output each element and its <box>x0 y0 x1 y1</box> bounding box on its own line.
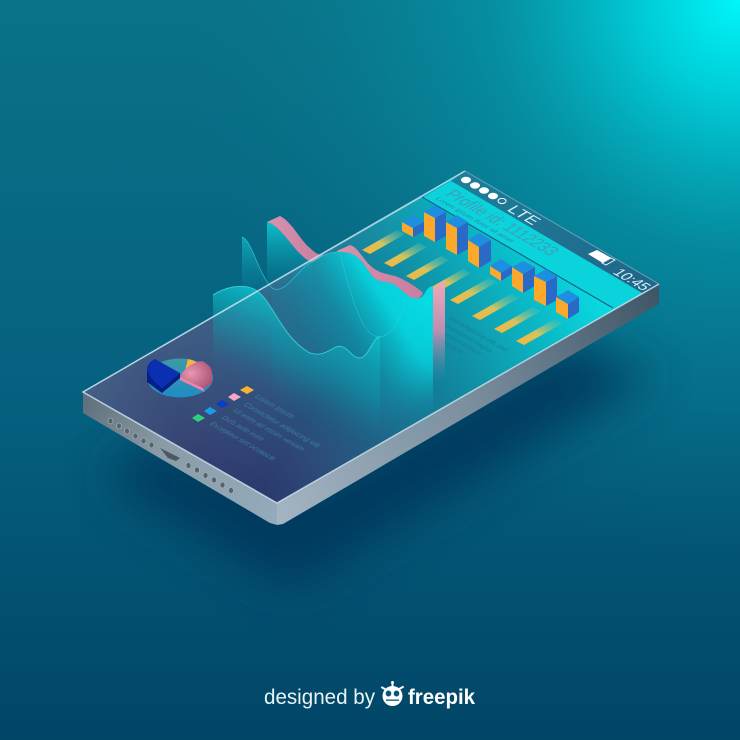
battery icon <box>588 250 615 265</box>
status bar <box>451 171 659 293</box>
right column <box>408 297 433 402</box>
tall left wave <box>242 237 272 305</box>
legend text: Consectetur adipiscing elit <box>241 401 323 449</box>
profile id title: Profile id: 1112233 <box>441 187 564 258</box>
bar chart <box>402 205 579 319</box>
footer credit: designed by <box>264 686 375 709</box>
main wave fill <box>272 252 433 416</box>
note text: consequat <box>430 334 466 355</box>
profile header band <box>422 181 642 309</box>
note text: Sed adipiscing elit, sed <box>445 315 509 353</box>
bar 5 <box>490 259 512 281</box>
ribbon two <box>337 245 423 299</box>
bar 1 <box>402 215 424 237</box>
ribbon one <box>267 216 323 262</box>
bar 2 <box>424 205 446 242</box>
home connector <box>160 448 180 461</box>
stripes row one <box>362 230 471 293</box>
legend text: Ut enim ad minim veniam <box>230 407 308 452</box>
footer credit <box>264 681 475 709</box>
stripes row two <box>450 278 563 345</box>
pink vertical bar <box>433 280 445 382</box>
left side face <box>83 392 277 525</box>
legend text: Duis aute irure <box>219 414 267 442</box>
pie chart <box>147 358 213 398</box>
right side face <box>277 284 659 525</box>
screen surface <box>83 171 659 503</box>
bar 7 <box>534 269 557 306</box>
speaker holes right <box>186 462 234 494</box>
legend text <box>207 393 323 462</box>
front wave fill <box>213 286 380 409</box>
header divider <box>422 197 613 308</box>
left back wave fill <box>267 222 312 300</box>
pie pink slice side <box>180 377 205 392</box>
footer credit: freepik <box>408 686 475 709</box>
screen highlight edge <box>83 171 659 503</box>
legend text: Lorem ipsum <box>252 393 298 420</box>
profile subtitle: Lorem ipsum dolor sit amet <box>433 196 515 244</box>
left wave line <box>242 237 337 289</box>
note text: do eiusmod magna <box>440 322 494 354</box>
wave chart <box>212 216 445 423</box>
freepik mascot icon <box>381 681 404 706</box>
pie orange slice <box>185 359 197 371</box>
clock: 10:45 <box>609 266 654 293</box>
legend swatches <box>192 386 254 422</box>
phone body <box>83 284 659 525</box>
bar 6 <box>512 261 535 293</box>
note text: ut exercitation <box>435 328 483 356</box>
pie pink slice top <box>180 361 212 388</box>
phone shadow <box>105 340 655 590</box>
glass edge line <box>83 197 422 392</box>
middle wave line <box>340 254 413 337</box>
pie blue slice side <box>147 370 180 393</box>
legend text: Excepteur sint occaecat <box>207 420 279 462</box>
signal dots <box>461 177 506 204</box>
bar 4 <box>468 233 491 268</box>
bar 8 <box>556 290 579 319</box>
bar 3 <box>446 215 468 255</box>
pie blue slice top <box>147 359 180 388</box>
LTE label: LTE <box>503 203 544 228</box>
speaker holes left <box>108 418 154 448</box>
